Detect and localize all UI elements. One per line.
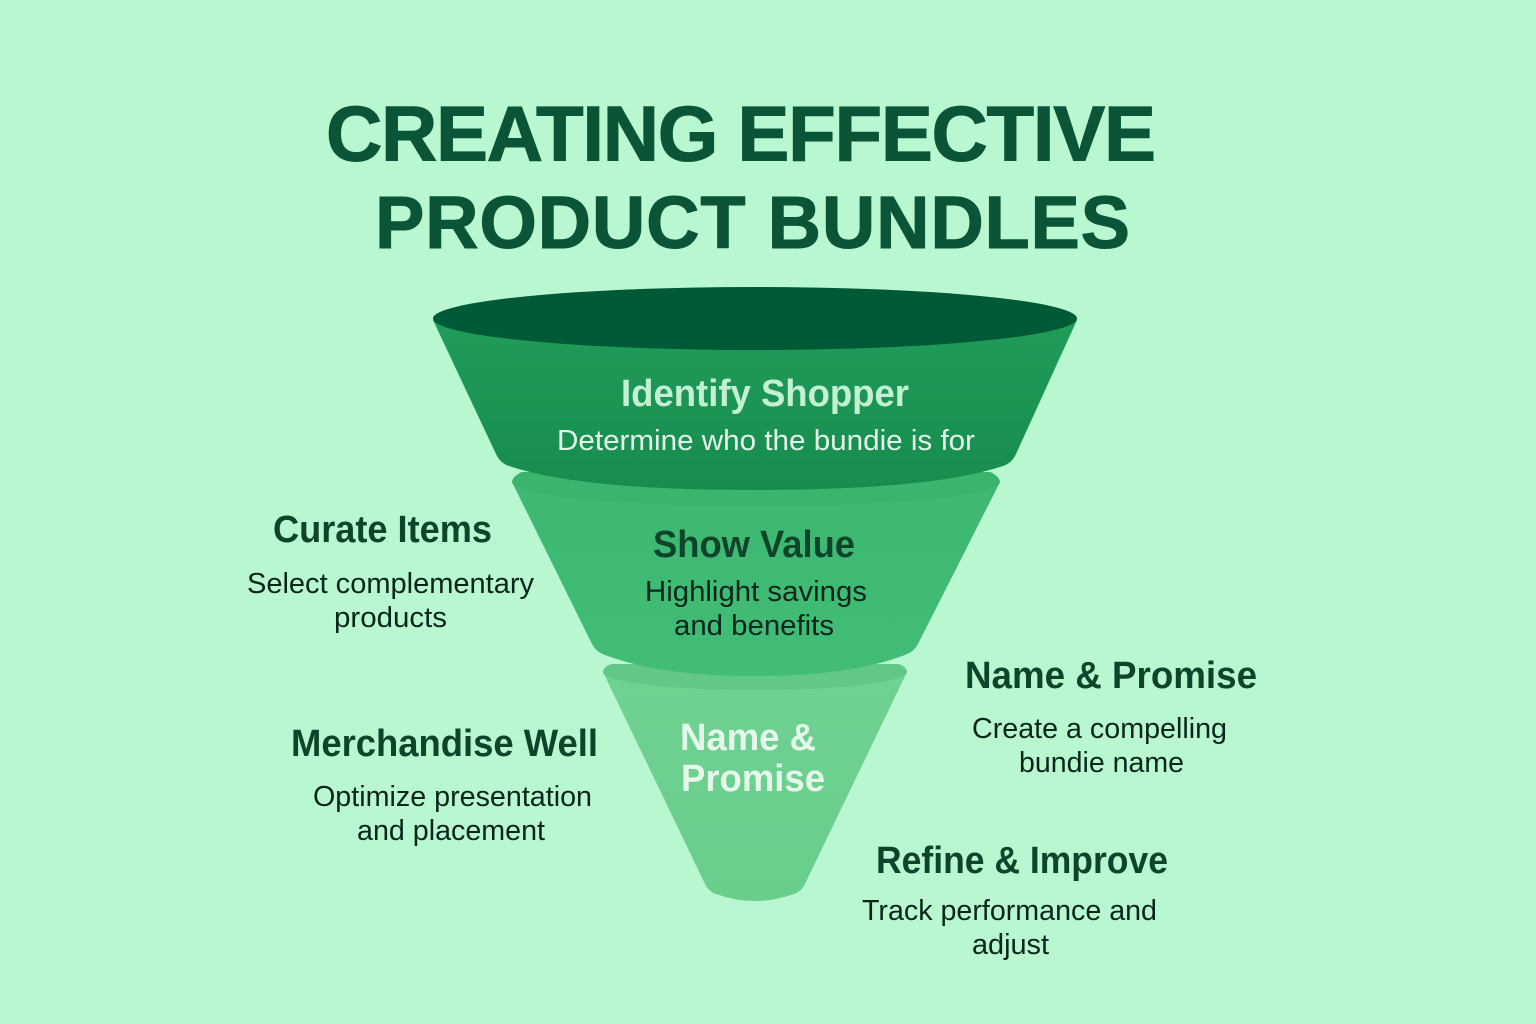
tier 2: show value — [512, 472, 1000, 676]
label: curate items — [247, 509, 534, 634]
title — [326, 90, 1156, 264]
funnel opening — [433, 287, 1077, 350]
label: name and promise — [965, 655, 1257, 779]
label: merchandise well: Optimize presentation — [313, 781, 592, 813]
label: merchandise well: and placement — [357, 815, 545, 847]
label: merchandise well: Merchandise Well — [291, 723, 598, 765]
label: curate items: Curate Items — [273, 509, 492, 551]
title: CREATING EFFECTIVE — [326, 90, 1156, 178]
label: name and promise: Create a compelling — [972, 713, 1227, 745]
label: merchandise well — [291, 723, 598, 847]
tier 3: name and promise — [603, 664, 907, 901]
tier 3: name and promise: Promise — [681, 758, 825, 800]
label: curate items: products — [334, 602, 447, 634]
tier 2: show value: Highlight savings — [645, 576, 867, 608]
label: name and promise: Name & Promise — [965, 655, 1257, 697]
tier 2: show value: and benefits — [674, 610, 834, 642]
label: refine and improve — [862, 840, 1168, 961]
tier 2: show value: Show Value — [653, 524, 855, 566]
label: refine and improve: adjust — [972, 929, 1049, 961]
tier 1: identify shopper: Identify Shopper — [621, 373, 909, 415]
label: curate items: Select complementary — [247, 568, 534, 600]
funnel — [433, 287, 1077, 901]
tier 3: name and promise: Name & — [680, 717, 816, 759]
tier 1: identify shopper: Determine who the bundie is for — [557, 425, 975, 457]
label: refine and improve: Track performance and — [862, 895, 1157, 927]
title: PRODUCT BUNDLES — [375, 181, 1130, 264]
label: name and promise: bundie name — [1019, 747, 1184, 779]
label: refine and improve: Refine & Improve — [876, 840, 1168, 882]
tier 1: identify shopper — [433, 320, 1077, 490]
